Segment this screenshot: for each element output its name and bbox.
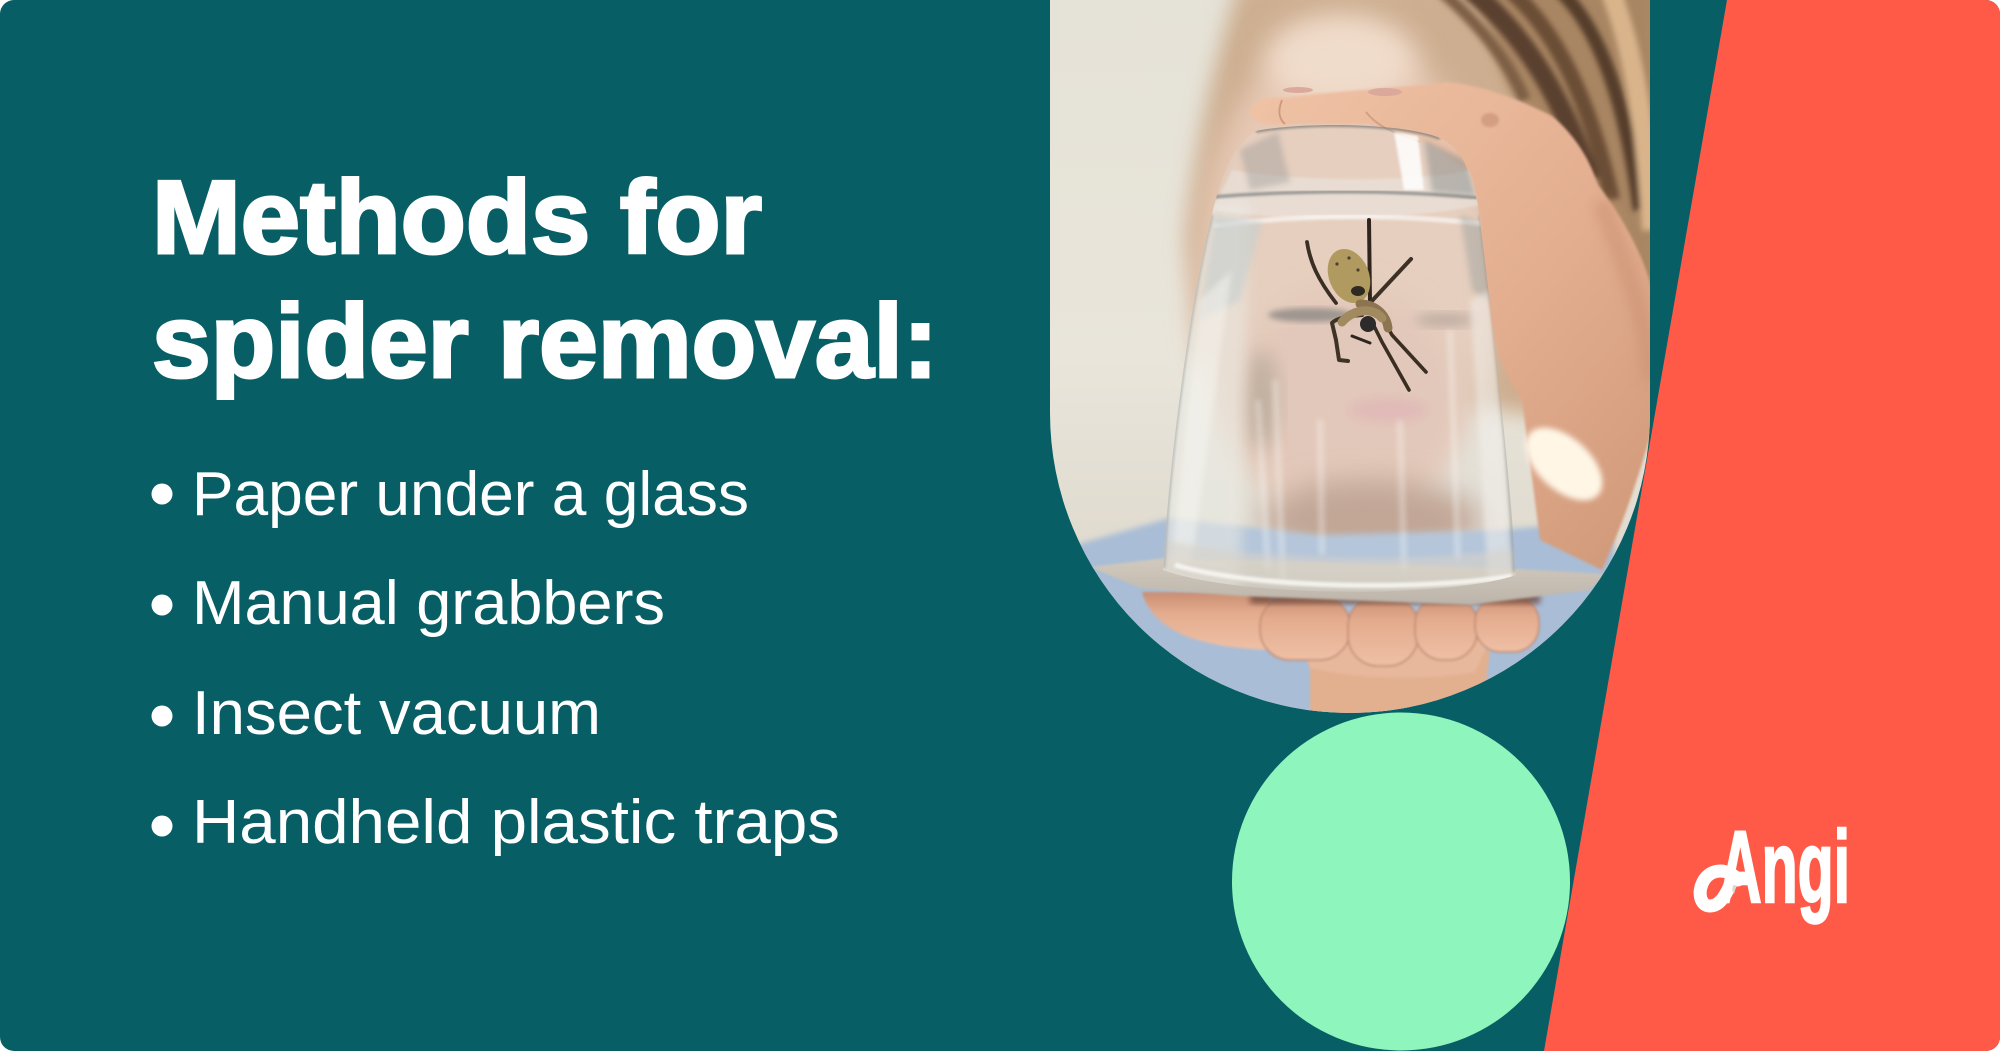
item: paper under a glass: Paper under a glass: [192, 460, 749, 529]
blue shirt: [1060, 518, 1640, 720]
photo: child holding spider under a glass: [1050, 0, 1660, 720]
coral diagonal panel: [1544, 0, 2000, 1051]
Angi logo: Angi: [1719, 810, 1850, 924]
mint green circle: [1232, 712, 1570, 1050]
fingers on top of the glass: [1279, 87, 1499, 142]
arm and raised hand: [1250, 82, 1652, 570]
drinking glass: [1163, 125, 1516, 592]
item: insect vacuum: Insect vacuum: [192, 679, 601, 748]
spider: [1307, 220, 1426, 390]
item: insect vacuum: [152, 691, 597, 734]
title: Methods for: [152, 160, 762, 276]
Angi logo: [1694, 826, 1847, 925]
bokeh highlight: [1524, 424, 1606, 504]
blurred hair: [1186, 0, 1660, 420]
bullet list of methods: [152, 460, 840, 857]
plate: [1090, 558, 1605, 605]
neck: [1310, 650, 1490, 720]
item: handheld plastic traps: Handheld plastic traps: [192, 788, 840, 857]
lower hand fingers: [1142, 592, 1540, 678]
title: [152, 160, 938, 400]
item: manual grabbers: Manual grabbers: [192, 569, 665, 638]
blurred face: [1194, 54, 1498, 496]
title: spider removal:: [152, 284, 938, 400]
